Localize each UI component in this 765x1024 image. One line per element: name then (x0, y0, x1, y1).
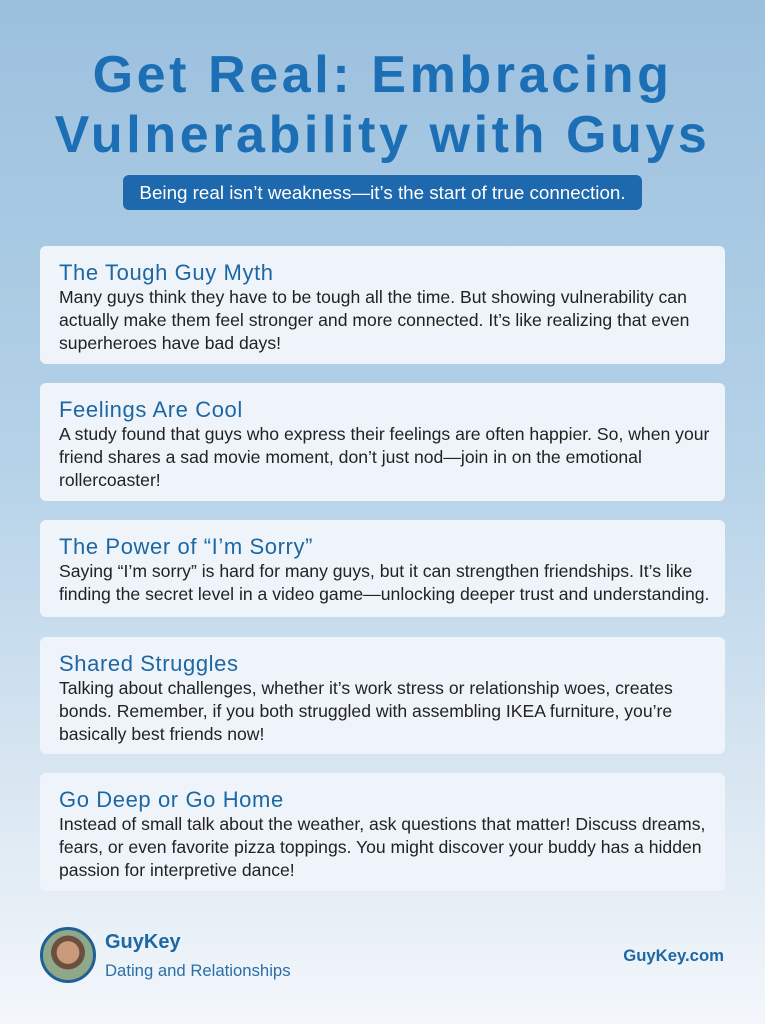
icon: avatar (40, 927, 96, 983)
text (59, 287, 689, 353)
title: Vulnerability with Guys (55, 106, 710, 164)
text: basically best friends now! (59, 724, 264, 744)
heading: The Power of “I’m Sorry” (59, 534, 313, 559)
subtitle pill: Being real isn’t weakness—it’s the start of true connection. (139, 182, 626, 203)
text: Talking about challenges, whether it’s work stress or relationship woes, creates (59, 678, 673, 698)
panel: feelings are cool (40, 383, 725, 501)
text (59, 561, 709, 604)
panel: power of sorry (40, 520, 725, 617)
panel: tough guy myth (40, 246, 725, 364)
panel: go deep (40, 773, 725, 891)
heading: Shared Struggles (59, 651, 239, 676)
text: Instead of small talk about the weather, ask questions that matter! Discuss dreams, (59, 814, 705, 834)
title (55, 46, 710, 164)
text: friend shares a sad movie moment, don’t just nod—join in on the emotional (59, 447, 642, 467)
text (59, 424, 710, 490)
text (59, 814, 705, 880)
text: superheroes have bad days! (59, 333, 281, 353)
text: bonds. Remember, if you both struggled with assembling IKEA furniture, you’re (59, 701, 672, 721)
footer brand (40, 927, 291, 983)
brand name: GuyKey (105, 931, 181, 953)
text: Many guys think they have to be tough all the time. But showing vulnerability can (59, 287, 687, 307)
text: rollercoaster! (59, 470, 161, 490)
heading: Go Deep or Go Home (59, 787, 284, 812)
text: A study found that guys who express their feelings are often happier. So, when your (59, 424, 709, 444)
heading: Feelings Are Cool (59, 397, 243, 422)
heading: The Tough Guy Myth (59, 260, 274, 285)
panel: shared struggles (40, 637, 725, 754)
text: actually make them feel stronger and more connected. It’s like realizing that even (59, 310, 689, 330)
footer url: GuyKey.com (623, 946, 724, 965)
text (59, 678, 673, 744)
text: passion for interpretive dance! (59, 860, 295, 880)
subtitle pill (123, 175, 642, 210)
text: Saying “I’m sorry” is hard for many guys, but it can strengthen friendships. It’s like (59, 561, 692, 581)
text: finding the secret level in a video game—unlocking deeper trust and understanding. (59, 584, 709, 604)
title: Get Real: Embracing (93, 46, 672, 104)
brand tagline: Dating and Relationships (105, 961, 291, 980)
text: fears, or even favorite pizza toppings. You might discover your buddy has a hidden (59, 837, 702, 857)
